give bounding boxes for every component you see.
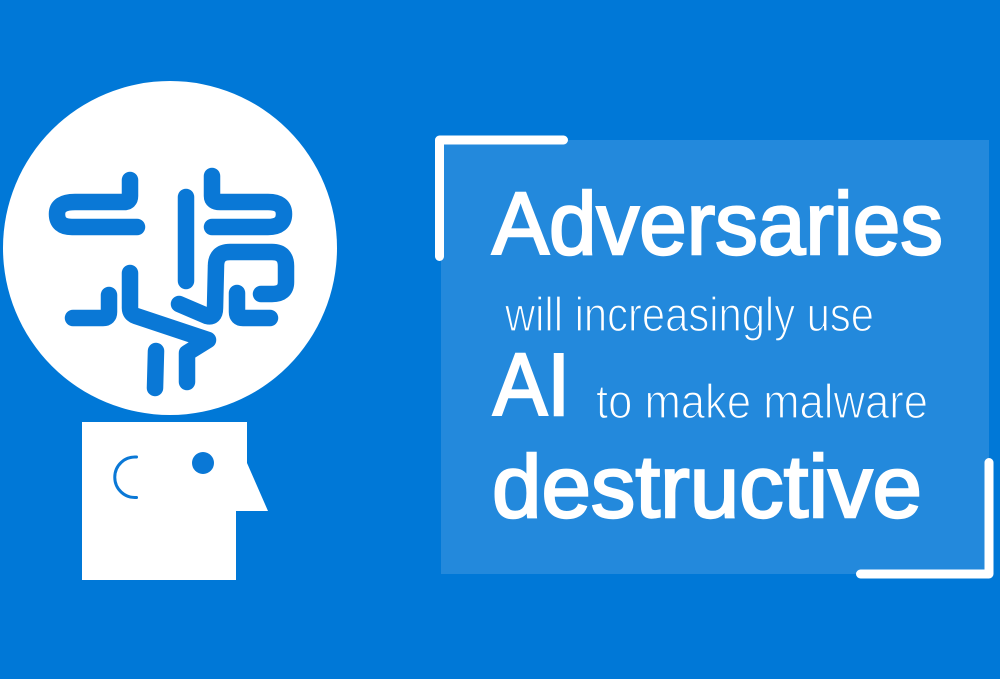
bottom-right corner bracket	[860, 462, 989, 574]
text: will increasingly use: will increasingly use	[504, 289, 874, 342]
icon: circle thought head	[3, 81, 337, 415]
icon: maze lines	[57, 176, 286, 388]
icon: eye	[192, 452, 214, 474]
icon: head profile	[82, 422, 268, 580]
top-left corner bracket	[440, 140, 564, 256]
icon: ear	[115, 457, 136, 498]
heading: AI: AI	[493, 335, 570, 434]
panel: message	[441, 140, 989, 574]
text: to make malware: to make malware	[596, 376, 928, 429]
heading: destructive: destructive	[492, 437, 922, 536]
illustration: person with maze mind	[3, 81, 337, 580]
heading: Adversaries: Adversaries	[492, 174, 943, 273]
